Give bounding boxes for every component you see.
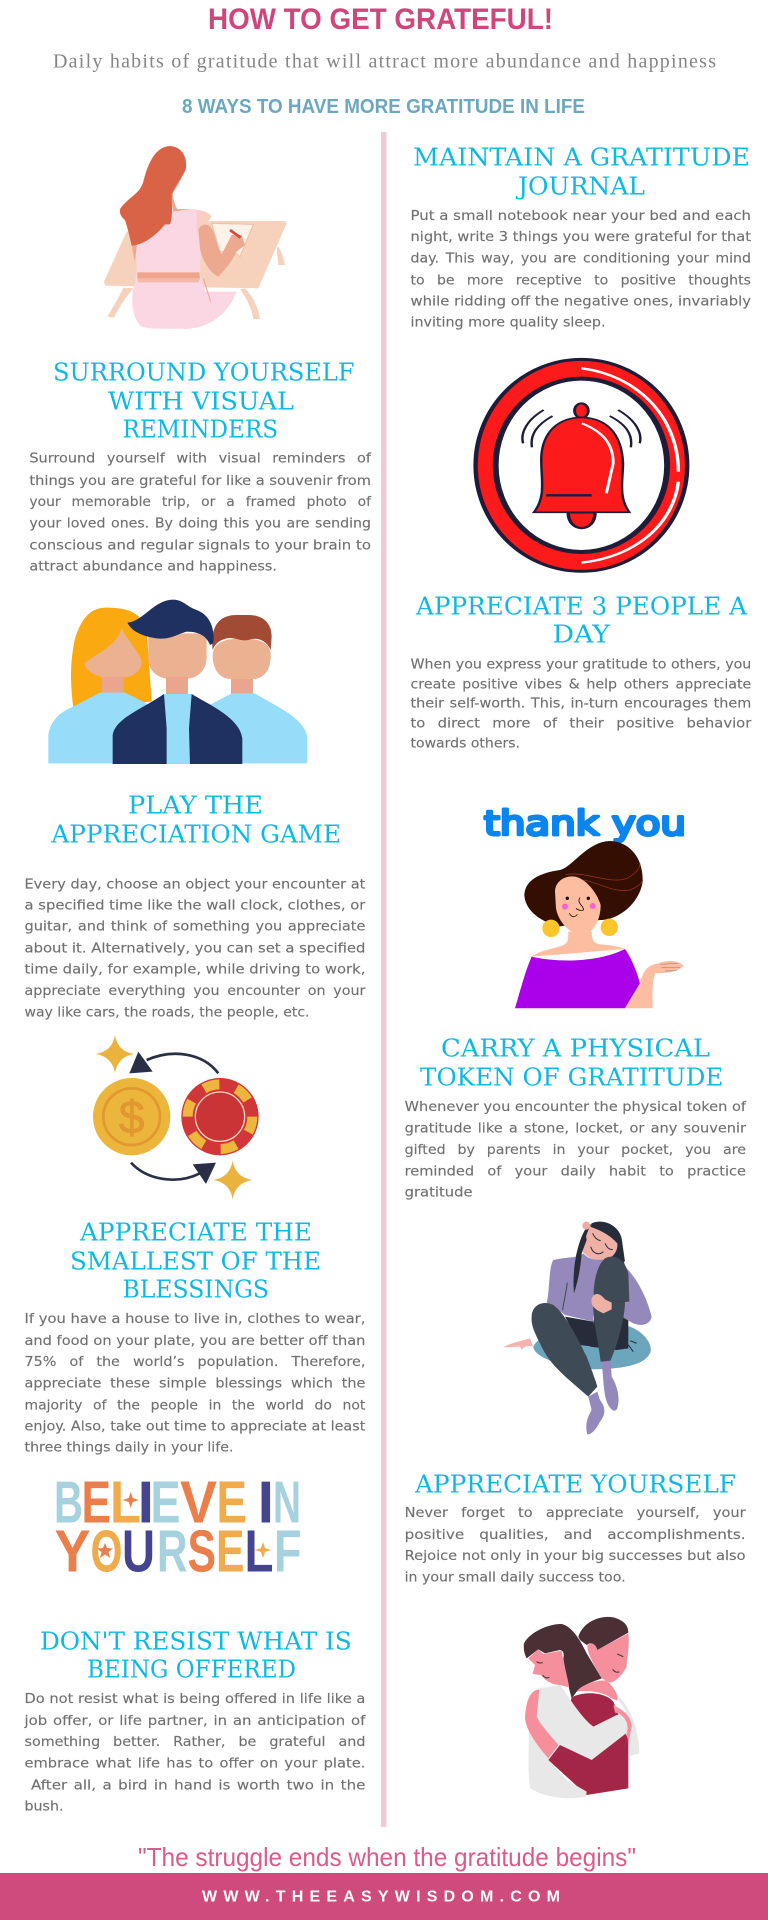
panel: carry a physical token of gratitude: [405, 1035, 747, 1200]
body text: majority of the people in the world do not: [24, 1397, 365, 1413]
body text: three things daily in your life.: [24, 1440, 234, 1456]
dollar sign: $: [119, 1091, 144, 1143]
believe in yourself lettering: [54, 1470, 302, 1585]
body text: [410, 208, 751, 331]
panel: play the appreciation game: [24, 792, 366, 1021]
body text: your loved ones. By doing this you are sending: [29, 515, 371, 531]
heading: MAINTAIN A GRATITUDE: [413, 144, 750, 172]
panel: appreciate yourself: [405, 1470, 746, 1585]
heading: WITH VISUAL: [108, 387, 294, 415]
believe in yourself lettering: E: [216, 1519, 244, 1585]
believe in yourself lettering: L: [244, 1519, 274, 1585]
body text: Whenever you encounter the physical token of: [405, 1099, 747, 1115]
woman figure: [515, 841, 683, 1008]
body text: something better. Rather, be grateful and: [24, 1734, 365, 1750]
body text: things you are grateful for like a souvenir from: [29, 473, 371, 489]
body text: guitar, and think of something you appreciate: [24, 918, 365, 934]
heading: [50, 792, 341, 848]
believe in yourself lettering: N: [273, 1470, 301, 1536]
body text: create positive vibes & help others appreciate: [410, 676, 751, 692]
heading: [420, 1035, 723, 1091]
body text: [405, 1099, 747, 1200]
believe in yourself lettering: F: [274, 1519, 302, 1585]
believe in yourself lettering: V: [180, 1470, 217, 1536]
website: WWW.THEEASYWISDOM.COM: [202, 1889, 560, 1906]
believe in yourself lettering: U: [122, 1519, 155, 1585]
body text: in your small daily success too.: [405, 1569, 626, 1585]
body text: Never forget to appreciate yourself, your: [405, 1505, 746, 1521]
heading: APPRECIATION GAME: [50, 820, 341, 848]
body text: Rejoice not only in your big successes but also: [405, 1548, 746, 1564]
body text: bush.: [24, 1798, 64, 1814]
body text: [410, 656, 752, 751]
illustration: thank you woman: [484, 804, 686, 1008]
heading: BEING OFFERED: [87, 1655, 296, 1683]
body text: night, write 3 things you were grateful for that: [410, 229, 751, 245]
footer band: [0, 1873, 768, 1920]
illustration: coins exchange: [93, 1035, 259, 1199]
illustration: two people hugging: [524, 1617, 639, 1798]
body text: [24, 1311, 365, 1456]
heading: [53, 359, 354, 443]
quote: "The struggle ends when the gratitude begins": [138, 1842, 636, 1872]
panel: don't resist what is being offered: [23, 1627, 367, 1814]
heading: APPRECIATE 3 PEOPLE A: [415, 593, 748, 621]
believe in yourself lettering: I: [138, 1470, 154, 1536]
body text: reminded of your daily habit to practice: [405, 1163, 746, 1179]
body text: gratitude like a stone, locket, or any souvenir: [405, 1120, 746, 1136]
believe in yourself lettering: R: [157, 1519, 188, 1585]
body text: while ridding off the negative ones, invariably: [410, 294, 751, 310]
body text: about it. Alternatively, you can set a specified: [24, 940, 365, 956]
body text: Surround yourself with visual reminders of: [29, 451, 372, 467]
believe in yourself lettering: E: [216, 1470, 247, 1536]
body text: to direct more of their positive behavior: [410, 716, 752, 732]
believe in yourself lettering: I: [258, 1470, 274, 1536]
body text: [23, 1691, 367, 1814]
panel: appreciate the smallest of the blessings: [24, 1219, 365, 1456]
believe in yourself lettering: S: [188, 1519, 216, 1585]
heading: APPRECIATE YOURSELF: [414, 1470, 736, 1498]
believe in yourself lettering: O: [90, 1519, 122, 1585]
heading: APPRECIATE THE: [79, 1219, 312, 1247]
body text: [24, 876, 366, 1021]
body text: attract abundance and happiness.: [29, 558, 277, 574]
illustration: woman writing at desk: [104, 146, 287, 329]
section heading: 8 WAYS TO HAVE MORE GRATITUDE IN LIFE: [182, 96, 585, 118]
heading: CARRY A PHYSICAL: [441, 1035, 710, 1063]
body text: Put a small notebook near your bed and each: [410, 208, 751, 224]
body text: [405, 1505, 746, 1585]
body text: If you have a house to live in, clothes to wear,: [24, 1311, 365, 1327]
heading: [40, 1627, 352, 1683]
believe in yourself lettering: E: [82, 1470, 111, 1536]
heading: [70, 1219, 321, 1303]
body text: embrace what life has to offer on your plate.: [24, 1755, 365, 1771]
body text: to be more receptive to positive thoughts: [410, 272, 751, 288]
body text: [29, 451, 372, 574]
center divider: [381, 132, 386, 1827]
body text: appreciate these simple blessings which the: [24, 1375, 365, 1391]
heading: SURROUND YOURSELF: [53, 359, 354, 387]
believe in yourself lettering: L: [110, 1470, 141, 1536]
believe in yourself lettering: B: [54, 1470, 83, 1536]
title: HOW TO GET GRATEFUL!: [208, 3, 553, 36]
body text: After all, a bird in hand is worth two in the: [31, 1777, 365, 1793]
body text: towards others.: [410, 735, 520, 751]
body text: When you express your gratitude to others, you: [410, 656, 751, 672]
body text: gifted by parents in your pocket, you are: [405, 1142, 746, 1158]
body text: Every day, choose an object your encounter at: [24, 876, 365, 892]
heading: JOURNAL: [515, 172, 645, 200]
heading: REMINDERS: [122, 415, 278, 443]
body text: gratitude: [405, 1184, 473, 1200]
body text: appreciate everything you encounter on your: [24, 983, 366, 999]
panel: appreciate 3 people a day: [410, 593, 752, 751]
heading: DAY: [552, 621, 611, 649]
heading: DON'T RESIST WHAT IS: [40, 1627, 352, 1655]
body text: a specified time like the wall clock, clothes, or: [24, 897, 366, 913]
body text: Do not resist what is being offered in life like a: [24, 1691, 365, 1707]
body text: enjoy. Also, take out time to appreciate at least: [24, 1418, 365, 1434]
body text: conscious and regular signals to your brain to: [29, 537, 371, 553]
body text: day. This way, you are conditioning your mind: [410, 250, 751, 266]
body text: time daily, for example, while driving to work,: [24, 962, 365, 978]
body text: and food on your plate, you are better off than: [24, 1333, 365, 1349]
body text: positive qualities, and accomplishments.: [405, 1527, 746, 1543]
illustration: sitting woman hugging knee: [503, 1222, 652, 1434]
heading: TOKEN OF GRATITUDE: [420, 1063, 723, 1091]
body text: 75% of the world’s population. Therefore,: [24, 1354, 365, 1370]
subtitle: Daily habits of gratitude that will attract more abundance and happiness: [53, 50, 716, 72]
heading: [415, 593, 748, 649]
body text: job offer, or life partner, in an anticipation of: [23, 1713, 367, 1729]
heading: [413, 144, 750, 200]
heading: BLESSINGS: [122, 1275, 269, 1303]
panel: maintain a gratitude journal: [410, 144, 751, 331]
panel: surround yourself with visual reminders: [29, 359, 372, 574]
body text: way like cars, the roads, the people, etc.: [24, 1005, 310, 1021]
body text: inviting more quality sleep.: [410, 315, 606, 331]
body text: your memorable trip, or a framed photo of: [29, 494, 372, 510]
thank you lettering: thank you: [484, 804, 686, 844]
body text: their self-worth. This, in-turn encourages them: [410, 696, 751, 712]
illustration: three people: [48, 600, 307, 764]
illustration: alarm bell in ring: [476, 359, 687, 571]
heading: SMALLEST OF THE: [70, 1247, 321, 1275]
believe in yourself lettering: E: [150, 1470, 180, 1536]
believe in yourself lettering: Y: [54, 1519, 90, 1585]
heading: PLAY THE: [128, 792, 263, 820]
